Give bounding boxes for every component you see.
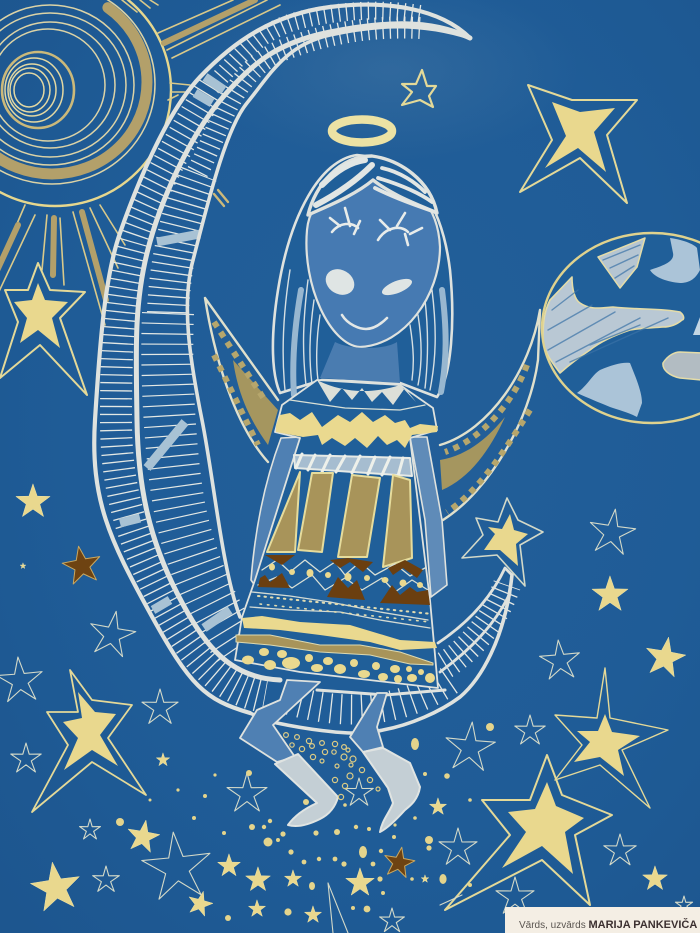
- earth: [542, 233, 700, 423]
- left arm: [251, 437, 301, 590]
- right sock: [363, 748, 420, 832]
- dots row: [250, 592, 430, 628]
- right land: [663, 352, 700, 380]
- large star left bottom: [32, 670, 146, 812]
- yellow wavy band: [242, 616, 437, 650]
- dress body: [235, 380, 438, 688]
- name label: [505, 907, 700, 933]
- outer band hatch: [116, 87, 265, 697]
- oval dots: [242, 648, 435, 683]
- mouth: [342, 315, 387, 329]
- halo: [332, 120, 392, 142]
- fringe: [308, 156, 437, 215]
- zigzag ovals: [269, 564, 423, 588]
- dress: [235, 380, 438, 688]
- yellow zigzag: [276, 412, 438, 448]
- collar triangles: [317, 380, 416, 405]
- sash stripe: [294, 455, 412, 476]
- cloud bottom: [577, 363, 642, 417]
- cheeks: [321, 264, 359, 300]
- neck: [320, 342, 400, 383]
- left leg: [240, 680, 320, 762]
- large star bottom right: [445, 755, 612, 910]
- star beside wing: [462, 498, 543, 586]
- left wing: [205, 298, 278, 462]
- right leg: [350, 693, 387, 752]
- gold dust dots: [116, 723, 494, 921]
- star on sun ray: [0, 263, 87, 395]
- sun: [0, 0, 280, 325]
- right arm: [410, 437, 447, 597]
- inner band hatch middle: [168, 173, 197, 313]
- big star top right: [520, 85, 637, 203]
- right wing: [440, 310, 540, 520]
- angel: [235, 120, 452, 832]
- tall star lines at bottom: [328, 883, 462, 933]
- star right middle: [555, 668, 668, 808]
- lower horn: [250, 568, 512, 733]
- left sock: [275, 754, 338, 826]
- inner band hatch lower: [167, 313, 240, 650]
- crescent moon: [94, 5, 512, 733]
- gold stripes: [267, 472, 412, 567]
- outer band hatch top: [212, 11, 420, 87]
- sun rays: [0, 0, 280, 325]
- cloud top right: [650, 238, 700, 283]
- eyes: [330, 208, 422, 245]
- face: [306, 178, 440, 347]
- moon inner line: [187, 27, 470, 617]
- moon outer edge: [94, 5, 470, 713]
- outline stars: [0, 506, 693, 932]
- star near moon top: [402, 70, 436, 107]
- brown triangles: [258, 555, 430, 605]
- triangle land: [598, 238, 645, 288]
- gold wavy band: [236, 635, 433, 665]
- gold rings between the legs: [284, 733, 380, 800]
- inner band hatch top: [197, 28, 420, 173]
- moon light patches: [120, 77, 230, 628]
- scattered gold stars: [16, 484, 688, 922]
- hair: [273, 155, 452, 397]
- zigzag lines: [258, 560, 428, 592]
- continent hatched: [543, 277, 684, 373]
- brown stars: [60, 543, 417, 878]
- name label: Vārds, uzvārds MARIJA PANKEVIČA: [519, 919, 697, 931]
- moon middle line: [136, 24, 470, 680]
